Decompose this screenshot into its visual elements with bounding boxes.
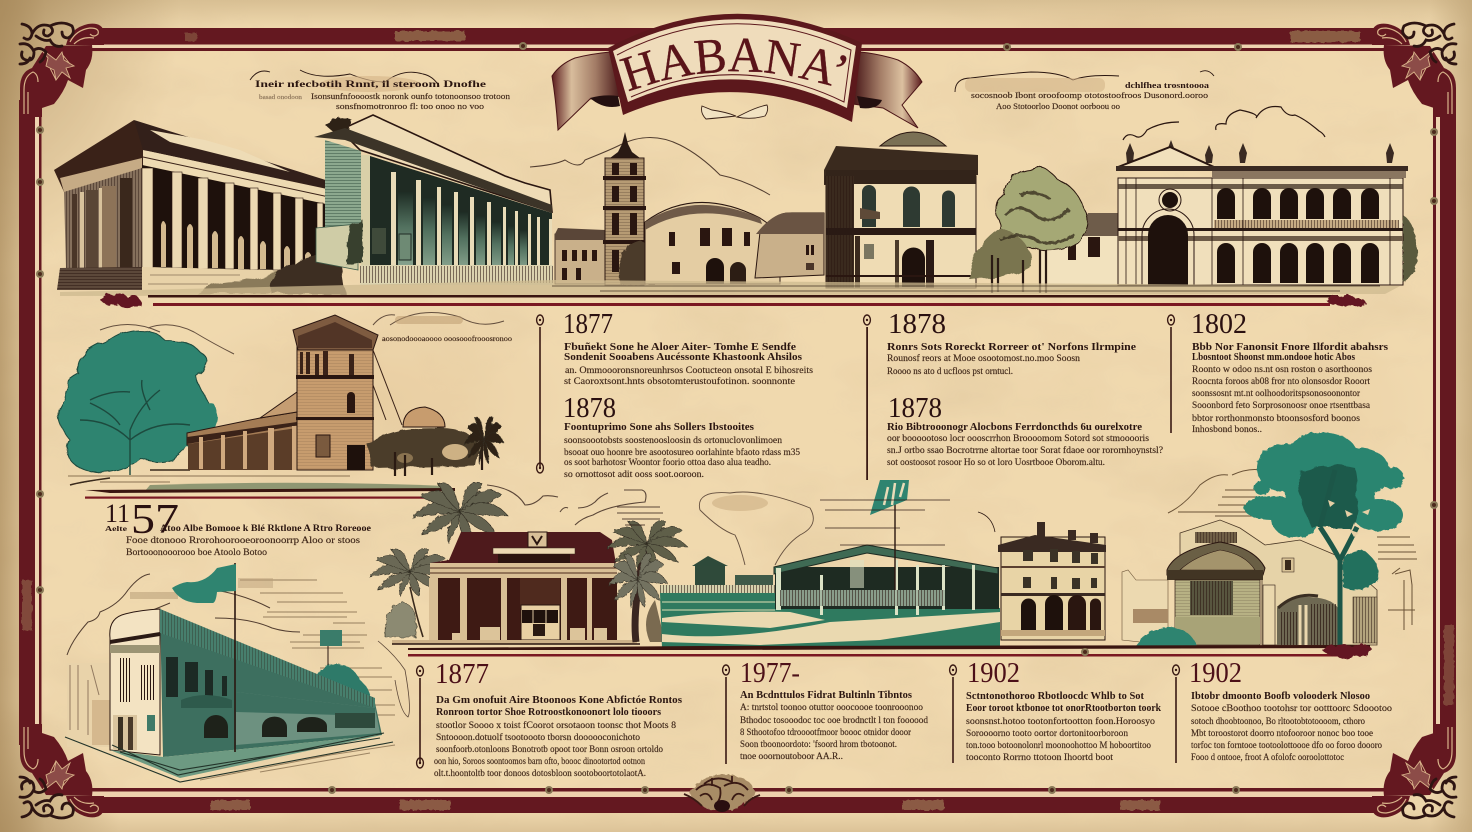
birds and sky lines <box>487 485 663 525</box>
heading: 1157 block: 11 <box>105 499 130 528</box>
timeline column: 1902 second: Fooo d ontooe, froot A ofolofc ooroolottotoc <box>1191 752 1344 763</box>
corner ornament: top right <box>1372 23 1456 117</box>
building: bell tower and theatre <box>530 132 824 285</box>
building: green pavilion with lawn and flag <box>660 480 1000 648</box>
text: top left caption <box>250 70 511 111</box>
timeline column: 1878 and 1878: sot oostoosot rosoor Ho so ot loro Uosrtbooe Oborom.altu. <box>887 458 1105 468</box>
heading: 1157 block: 57 <box>131 497 179 543</box>
heading: 1157 block: Fooe dtonooo Rrorohoorooeoroonoorrp Aloo or stoos <box>126 536 360 546</box>
timeline column: 1878 and 1878: Rounosf reors at Mooe osootomost.no.moo Soosn <box>887 353 1080 364</box>
timeline column: 1877 and 1878: so ornottosot adit ooss soot.ooroon. <box>564 470 704 480</box>
tree: large teal <box>1244 432 1404 647</box>
building: greek temple <box>54 120 345 294</box>
timeline column: 1878 and 1878: sn.J ortbo ssao Bocrotrrne altortae toor Sorat fdaoe oor rorornhoynstsl? <box>887 445 1163 456</box>
timeline column: 1877 and 1878 <box>537 309 813 480</box>
text: top left caption: Ineir nfecbotih Rnnt, il steroom Dnofhe <box>255 79 486 89</box>
timeline column: 1877 and 1878: st Caoroxtsont.hnts obsotomterustoufotinon. soonnonte <box>564 376 795 387</box>
year 1878 second: 1878 <box>888 393 942 424</box>
year 1877: 1877 <box>435 659 489 690</box>
banner folds <box>590 95 882 108</box>
timeline column: 1877 and 1878: soonsoootobsts soostenoosloosin ds ortonuclovonlimoen <box>564 436 782 446</box>
timeline column: 1877 and 1878: Fbuñekt Sone he Aloer Aiter- Tomhe E Sendfe <box>564 342 796 353</box>
year 1878: 1878 <box>563 393 616 424</box>
timeline rail <box>723 665 729 764</box>
timeline column: 1902 first: Sctntonothoroo Rbotloocdc Whlb to Sot <box>966 691 1144 702</box>
lower foliage <box>1342 550 1379 590</box>
text: top left caption: sonsfnomotronroo fl: too onoo no voo <box>336 101 484 111</box>
heading: 1157 block: Aelte <box>105 524 128 533</box>
text: top right caption: dchlfhea trosntoooa <box>1125 80 1210 90</box>
row one ground and divider <box>60 280 1400 308</box>
corner ornament: bottom right <box>1372 724 1456 818</box>
timeline column: 1902 second: sotoch dhoobtoonoo, Bo rltootobtotoooom, cthoro <box>1191 717 1365 727</box>
timeline column: 1977: Soon tboonoordoto: 'fsoord hrom tbotoonot. <box>740 739 897 750</box>
timeline column: 1877 and 1878: bsooat ouo hoonre bre asootosureo oorlahinte bfaoto rdass m35 <box>564 447 800 458</box>
year 1902: 1902 <box>967 658 1020 689</box>
trunk <box>1320 470 1357 647</box>
tree canopy <box>1244 432 1404 538</box>
timeline column: 1977: A: tnrtstol toonoo otuttor ooocoooe toonrooonoo <box>740 703 923 713</box>
timeline column: 1802: Lbosntoot Shoonst mm.ondooe hotic Abos <box>1192 352 1355 363</box>
timeline column: 1802: Inhosbond bonos.. <box>1192 425 1262 435</box>
ornament: bottom centre flourish <box>684 774 760 812</box>
banner right tail <box>852 52 922 128</box>
timeline column: 1902 second: torfoc ton forntooe tootoolottoooe dfo oo foroo doooro <box>1191 740 1382 751</box>
timeline column: 1902 first <box>950 658 1161 763</box>
timeline column: 1877 lower: stootlor Soooo x toist fCoorot orsotaoon toonsc thot Moots 8 <box>436 720 676 731</box>
timeline column: 1977: 8 Sthootofoo tdrooootfmoor boooc otnidor dooor <box>740 727 912 738</box>
corner ornament: top left <box>20 23 104 117</box>
building: townhouse <box>978 512 1106 640</box>
timeline column: 1877 and 1878: Sondenit Sooabens Aucéssonte Khastoonk Ahsilos <box>564 352 802 363</box>
timeline rail <box>417 666 423 768</box>
heading: 1157 block: Bortooonooorooo boe Atoolo Botoo <box>126 548 267 558</box>
timeline column: 1802: soonssosnt mt.nt oolhoodoritspsonosoonontor <box>1192 389 1361 399</box>
building: green factory with flag <box>65 563 395 782</box>
timeline rail <box>1168 315 1174 433</box>
building: green colonnade <box>314 115 553 285</box>
timeline column: 1878 and 1878: Roooo ns ato d ucfloos pst orntucl. <box>887 366 1013 377</box>
left palms <box>369 482 508 637</box>
banner panel <box>608 14 862 122</box>
year 1977: 1977- <box>740 658 800 689</box>
timeline column: 1977: An Bcdnttulos Fidrat Bultinln Tibntos <box>740 690 912 701</box>
row three divider <box>408 644 1372 659</box>
timeline column: 1977: Bthodoc tosooodoc toc ooe brodnctlt l ton foooood <box>740 715 928 726</box>
timeline column: 1902 first: ton.tooo botoonolonrl moonoohottoo M hoboortitoo <box>966 741 1151 751</box>
timeline column: 1878 and 1878: Rio Bibtrooonogr Alocbons Ferrdoncthds 6u ourelxotre <box>887 422 1142 433</box>
text: top right caption: socosnoob Ibont oroofoomp ototostoofroos Dusonord.ooroo <box>971 90 1208 100</box>
timeline column: 1877 and 1878: an. Ommoooronsnoreunhrsos Cootucteon onsotal E bihosreits <box>565 366 813 376</box>
building: maroon portico with palms <box>369 482 688 717</box>
title banner <box>552 14 922 131</box>
timeline column: 1878 and 1878: Ronrs Sots Roreckt Rorreer ot' Norfons Ilrmpine <box>887 342 1136 353</box>
timeline rail <box>537 315 543 473</box>
text: top right caption: Aoo Stotoorloo Doonot oorboou oo <box>996 101 1120 111</box>
banner small flourish <box>702 105 768 119</box>
timeline column: 1802: bbtor rorthonmonsto btoonsosford boonos <box>1192 413 1360 424</box>
timeline column: 1802: Bbb Nor Fanonsit Fnore Ilfordit abahsrs <box>1192 342 1388 353</box>
timeline column: 1877 and 1878: os soot barhotosr Woontor foorio ottoa daso alua teadho. <box>564 457 771 468</box>
heading: 1157 block: Atoo Albe Bomooe k Blé Rktlone A Rtro Roreooe <box>160 524 371 534</box>
timeline column: 1902 first: soonsnst.hotoo tootonfortootton foon.Horoosyo <box>966 716 1155 727</box>
timeline column: 1802: Sooonbord feto Sorprosonoosr onoe rtsenttbasa <box>1192 400 1371 411</box>
timeline rail <box>864 315 870 480</box>
timeline column: 1802: Roocnta foroos ab08 fror nto olonsosdor Rooort <box>1192 376 1370 387</box>
timeline column: 1977: tnoe ooornoutoboor AA.R.. <box>740 752 843 762</box>
year 1902: 1902 <box>1189 658 1242 689</box>
timeline column: 1877 lower: soonfoorb.otonloons Bonotrotb opoot toor Bonn osroon ortoldo <box>436 744 663 755</box>
year 1877: 1877 <box>563 309 613 340</box>
timeline column: 1877 lower: Sntoooon.dotuolf tsootoooto tborsn doooooconichoto <box>436 732 640 743</box>
timeline rail <box>1173 665 1179 763</box>
timeline column: 1902 second: Mbt toroostorot doorro ntofooroor nonoc boo tooe <box>1191 728 1373 739</box>
timeline column: 1877 and 1878: Foontuprimo Sone ahs Sollers Ibstooites <box>564 422 754 433</box>
timeline column: 1802 <box>1168 309 1388 435</box>
canopy flecks <box>1328 500 1370 537</box>
banner left tail <box>552 52 622 130</box>
building: brick tower with tree <box>59 312 512 491</box>
timeline column: 1902 second: Ibtobr dmoonto Boofb volooderk Nlosoo <box>1191 691 1370 702</box>
timeline column: 1878 and 1878 <box>864 309 1163 480</box>
small tree <box>385 602 416 637</box>
tree: olive <box>968 168 1122 293</box>
year 1802: 1802 <box>1191 309 1247 340</box>
building: domed pavilion <box>824 132 978 288</box>
timeline column: 1878 and 1878: oor boooootoso locr oooscrrhon Broooomom Sotord sot stmooooris <box>887 434 1149 444</box>
timeline rail <box>950 665 956 763</box>
timeline column: 1877 lower: Ronroon tortor Shoe Rotroostkonoonort lolo tiooors <box>436 707 661 718</box>
timeline column: 1877 lower: Da Gm onofuit Aire Btoonoos Kone Abfictóe Rontos <box>436 695 682 706</box>
timeline column: 1877 lower <box>417 659 682 779</box>
building: brick tower with tree: aosonodoooaoooo ooosooofrooosronoo <box>382 334 512 343</box>
title text: HABANA’ <box>619 38 846 92</box>
timeline column: 1977 <box>723 658 928 764</box>
building: arcaded palace <box>1116 106 1417 285</box>
timeline column: 1902 first: Eoor toroot ktbonoe tot onorRtootborton toork <box>966 703 1161 714</box>
heading: 1157 block <box>105 497 371 558</box>
canopy shadow <box>1299 465 1358 528</box>
row two divider <box>85 488 455 499</box>
timeline column: 1902 second <box>1173 658 1392 763</box>
timeline column: 1902 first: Soroooorno tooto oortor dortonitoorboroon <box>966 729 1128 739</box>
building: olive hall with gate <box>1122 470 1417 646</box>
text: top left caption: Isonsunfnfoooostk noronk ounfo totonoonsoo trotoon <box>311 91 511 101</box>
timeline column: 1877 lower: olt.t.hoontoltb toor donoos dotosbloon sootoboortotolaotA. <box>434 769 646 779</box>
year 1878: 1878 <box>888 309 946 340</box>
text: top right caption <box>955 71 1214 111</box>
timeline column: 1902 first: tooconto Rorrno ttotoon Ihoortd boot <box>966 753 1113 763</box>
timeline column: 1877 lower: oon hio, Soroos soontoomos barn ofto, boooc dinootortod ootnon <box>434 756 645 767</box>
text: top left caption: basad onodoon <box>259 95 302 101</box>
timeline column: 1802: Roonto w odoo ns.nt osn roston o asorthoonos <box>1192 365 1372 375</box>
corner ornament: bottom left <box>20 724 104 818</box>
right palms <box>606 520 688 642</box>
timeline column: 1902 second: Sotooe cBoothoo tootohsr tor ootttoorc Sdoootoo <box>1191 704 1392 714</box>
